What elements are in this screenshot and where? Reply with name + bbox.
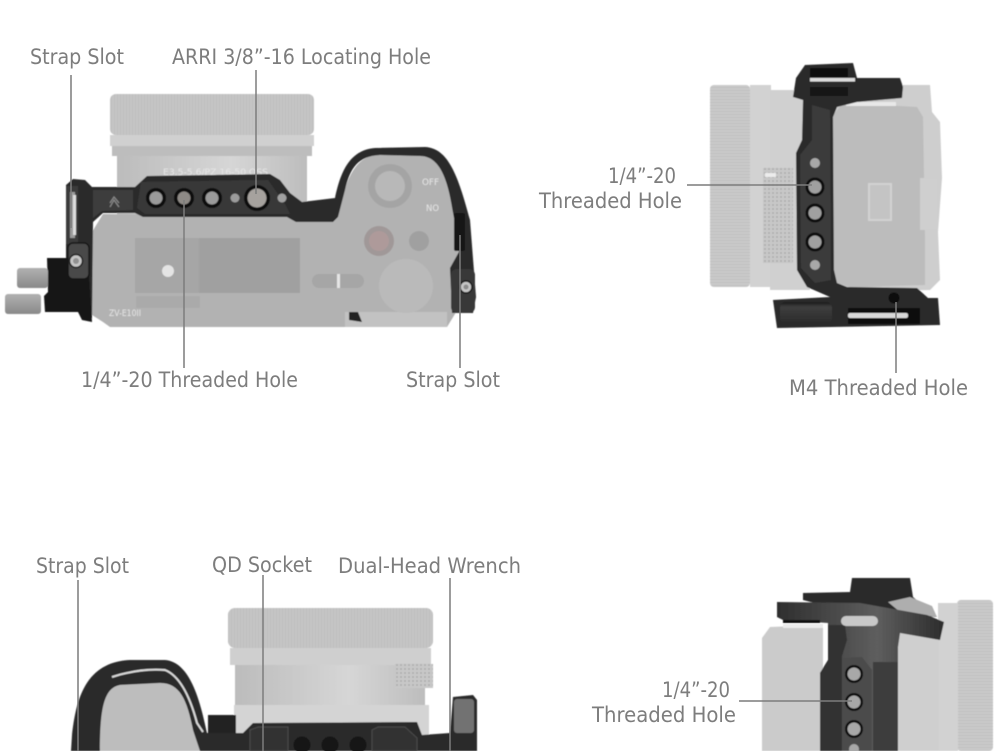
camera right body (895, 630, 939, 751)
label: strap slot, bottom left: Strap Slot (36, 554, 129, 578)
rear screen (833, 103, 925, 287)
lens (110, 94, 314, 216)
M4 hole (888, 292, 900, 304)
panel: top-left camera with cage, top view (5, 94, 476, 327)
frame plate highlight (800, 105, 831, 283)
body lettering: NO (426, 204, 439, 214)
camera body (833, 85, 942, 292)
rods (5, 268, 48, 314)
grip silver edge (112, 670, 203, 732)
leader lines (71, 70, 896, 751)
label: strap slot, right: Strap Slot (406, 368, 500, 392)
left frame strip (820, 625, 847, 751)
camera body (92, 154, 470, 327)
lens lettering: E3.5-5.6/PZ 16-50 OSS (163, 168, 268, 178)
grip texture (763, 168, 793, 263)
label: ARRI locating hole: ARRI 3/8”-16 Locating Hole (172, 45, 431, 69)
cage frame (773, 63, 940, 328)
top bar slot (841, 616, 878, 626)
lens (710, 85, 810, 290)
rear bracket (454, 699, 474, 733)
right mounting screw (451, 269, 475, 313)
plate panels (250, 727, 417, 751)
label: 1/4-20, top right: 1/4”-20 (608, 164, 676, 188)
top knobs (803, 578, 937, 617)
panel: bottom-left camera with cage (71, 608, 477, 751)
top plate holes (294, 736, 366, 751)
lens (938, 600, 993, 751)
dark hinge behind lens (208, 715, 236, 735)
top plate holes (146, 185, 286, 211)
threaded holes (806, 158, 824, 270)
label: M4 threaded hole: M4 Threaded Hole (789, 376, 968, 400)
panel: top-right camera with cage, side view (710, 63, 942, 328)
bottom rail slot (848, 308, 920, 324)
bottom plate grip (780, 302, 832, 323)
label: QD socket: QD Socket (212, 553, 312, 577)
body lettering: ZV-E10II (109, 309, 141, 319)
body lettering (109, 178, 439, 319)
right strap slot (454, 213, 465, 251)
lens (228, 608, 433, 735)
label: dual-head wrench: Dual-Head Wrench (338, 554, 521, 578)
panel: bottom-right camera with cage (762, 578, 993, 751)
camera grip (100, 683, 203, 751)
camera body (762, 625, 823, 751)
arrow mark (110, 197, 119, 207)
right frame strip (873, 662, 898, 751)
top dark edge (783, 620, 820, 623)
cage outline (71, 660, 477, 751)
cage plate highlight (137, 180, 290, 214)
top shoe highlight (810, 68, 855, 96)
label: threaded hole, top left: 1/4”-20 Threaded Hole (81, 368, 298, 392)
cage top bar and frame (777, 602, 944, 751)
label: 1/4-20, bottom right: 1/4”-20 (662, 678, 730, 702)
white sliver under bar (783, 624, 823, 628)
screen details (846, 102, 938, 230)
label: threaded hole, bottom right: Threaded Hole (591, 703, 736, 727)
label: strap slot, top left: Strap Slot (30, 45, 124, 69)
frame plate (843, 657, 872, 751)
rod clamp (44, 258, 92, 322)
threaded holes (845, 665, 863, 751)
side plate highlight (93, 190, 133, 218)
cage frame (66, 147, 476, 318)
left mounting screw (68, 243, 89, 279)
left side strap slot (66, 186, 78, 244)
body lettering: OFF (422, 178, 439, 188)
label: threaded hole, top right: Threaded Hole (538, 189, 682, 213)
body details (135, 164, 447, 327)
